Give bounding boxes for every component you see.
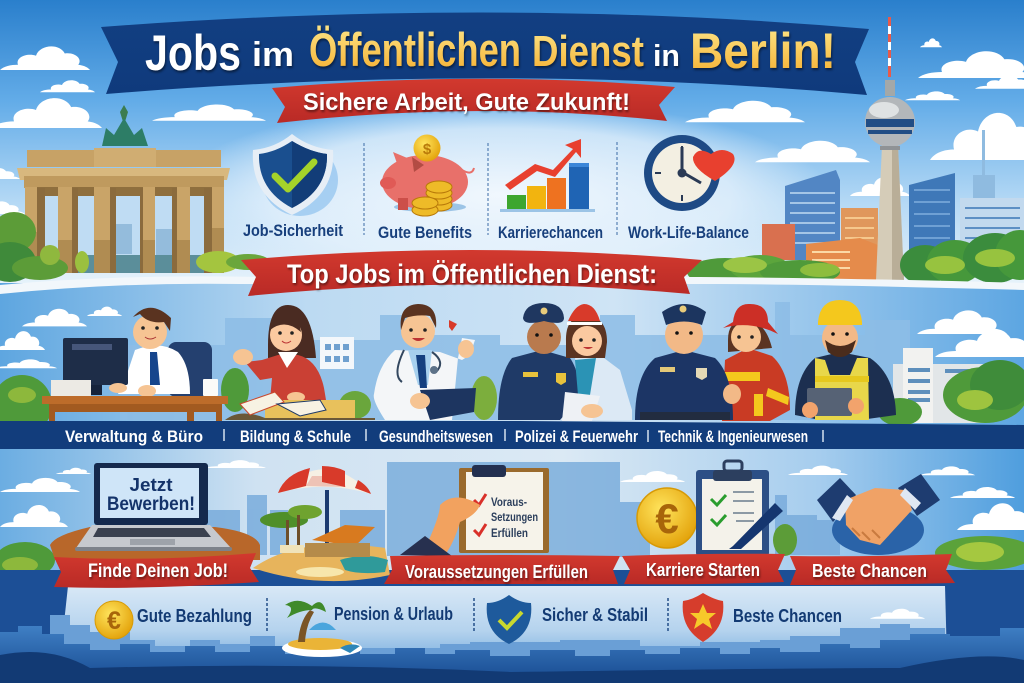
section 3 background xyxy=(0,449,1024,574)
icon: palm island xyxy=(282,601,362,657)
umbrella xyxy=(278,469,371,494)
illustration: beach island xyxy=(253,466,390,581)
icon: euro coin xyxy=(95,601,133,639)
ribbon text: Top Jobs im Öffentlichen Dienst: xyxy=(287,259,657,289)
label: Gute Bezahlung: Gute Bezahlung xyxy=(137,606,252,626)
euro coin: € xyxy=(655,495,679,542)
laptop: Bewerben! xyxy=(107,494,195,515)
ribbon text: Karriere Starten xyxy=(646,560,760,580)
title ribbon shape xyxy=(101,12,869,95)
checklist text: Voraus- xyxy=(491,495,527,509)
person: engineer xyxy=(795,300,896,420)
mug xyxy=(203,379,218,396)
trees: jobs section xyxy=(0,360,1024,435)
label: Gute Benefits: Gute Benefits xyxy=(378,223,472,242)
title text: Berlin! xyxy=(690,23,836,79)
building: schoolhouse xyxy=(320,337,354,369)
label: Technik und Ingenieurwesen: Technik & Ingenieurwesen xyxy=(658,427,808,446)
palm xyxy=(260,512,308,528)
person: firefighter xyxy=(722,304,790,421)
label: Verwaltung und Büro: Verwaltung & Büro xyxy=(65,427,203,446)
dividers xyxy=(267,598,668,633)
ribbon text: Beste Chancen xyxy=(812,561,927,581)
background: sky xyxy=(0,0,1024,290)
skyline: right city buildings xyxy=(762,130,1024,280)
clipboard xyxy=(696,461,783,556)
icon: small shield xyxy=(487,595,531,644)
ribbon xyxy=(790,554,955,585)
person: police officer 1 xyxy=(498,303,583,420)
benefit panel xyxy=(60,586,947,660)
step: start career xyxy=(622,461,785,584)
title banner xyxy=(101,12,869,95)
section 2 background xyxy=(0,283,1024,425)
lounger xyxy=(312,525,375,546)
step: best chances xyxy=(790,474,955,585)
pen xyxy=(729,503,783,549)
label: Pension und Urlaub: Pension & Urlaub xyxy=(334,604,453,624)
wood table xyxy=(50,527,260,560)
background: centre glow xyxy=(170,100,830,290)
label: Beste Chancen: Beste Chancen xyxy=(733,606,842,626)
title text: Jobs xyxy=(145,25,241,81)
icon: star shield xyxy=(683,593,723,642)
label: Gesundheitswesen: Gesundheitswesen xyxy=(379,427,493,446)
dark lower band xyxy=(0,570,1024,640)
label: Karrierechancen: Karrierechancen xyxy=(498,223,603,242)
ribbon text: Finde Deinen Job! xyxy=(88,561,228,582)
backdrop panel: requirements xyxy=(387,462,620,556)
background city: steps section xyxy=(205,495,840,560)
title text xyxy=(145,23,836,81)
ribbon text: Voraussetzungen Erfüllen xyxy=(405,562,588,582)
euro coin xyxy=(637,488,697,548)
red checks xyxy=(474,494,486,535)
clouds: steps section xyxy=(0,460,1024,530)
subtitle ribbon xyxy=(272,79,675,123)
benefits row xyxy=(243,134,749,242)
subtitle text: Sichere Arbeit, Gute Zukunft! xyxy=(303,89,630,116)
person: doctor xyxy=(374,304,476,420)
illustration: Fernsehturm tower xyxy=(865,17,915,280)
separators xyxy=(224,429,823,442)
label: Job-Sicherheit: Job-Sicherheit xyxy=(243,221,343,240)
background city: jobs section xyxy=(120,302,910,420)
trees: left of gate xyxy=(0,212,270,282)
ribbon xyxy=(54,553,259,588)
clouds: jobs section xyxy=(0,307,1024,368)
books and table xyxy=(265,400,355,418)
step: find your job xyxy=(50,463,260,588)
trees: right city xyxy=(687,230,1024,286)
step: meet requirements: Erfüllen xyxy=(491,526,528,540)
step: meet requirements: Setzungen xyxy=(491,510,538,524)
person: police officer 2 xyxy=(635,304,741,420)
title text: im xyxy=(252,36,294,74)
desk xyxy=(42,396,228,404)
icon: piggy bank with coins xyxy=(380,134,474,216)
white separating curve xyxy=(0,276,1024,294)
clouds: upper sky xyxy=(0,38,1024,214)
handshake xyxy=(817,474,940,555)
chair xyxy=(168,342,212,397)
summary row xyxy=(95,593,925,657)
label: Polizei und Feuerwehr: Polizei & Feuerwehr xyxy=(515,427,638,446)
ribbon: top jobs xyxy=(241,250,702,296)
trees: steps section xyxy=(0,524,1024,578)
screen text: Jetzt xyxy=(130,475,172,495)
icon: piggy bank with coins: $ xyxy=(423,141,432,158)
building: white office block xyxy=(893,348,985,423)
monitor xyxy=(63,338,128,385)
hands xyxy=(109,383,127,393)
head xyxy=(133,315,167,349)
clipboard xyxy=(459,468,549,553)
laptop xyxy=(75,463,232,551)
title text: Öffentlichen xyxy=(309,23,521,76)
papers xyxy=(51,380,91,396)
label: Sicher und Stabil: Sicher & Stabil xyxy=(542,605,648,625)
person: teacher xyxy=(225,305,375,420)
label: Bildung und Schule: Bildung & Schule xyxy=(240,427,351,446)
ribbon xyxy=(622,554,785,584)
icon: clock with heart xyxy=(644,135,735,211)
icon: shield with check xyxy=(253,134,338,216)
ribbon xyxy=(384,555,620,584)
title text: in xyxy=(653,38,680,73)
illustration: Brandenburg Gate xyxy=(17,105,230,273)
skyline silhouette xyxy=(0,626,1024,683)
icon: rising bar chart xyxy=(500,139,595,212)
divider xyxy=(364,142,617,235)
cloud xyxy=(870,609,925,619)
label: Work-Life-Balance: Work-Life-Balance xyxy=(628,223,749,242)
torso xyxy=(118,345,190,394)
jobs label bar xyxy=(0,421,1024,449)
person: office worker at desk xyxy=(42,308,228,421)
title text: Dienst xyxy=(532,27,644,76)
icon: euro coin: € xyxy=(107,607,121,635)
person: nurse xyxy=(560,304,632,421)
hand xyxy=(428,498,480,552)
skyline: pale buildings xyxy=(50,615,945,660)
step: meet requirements xyxy=(384,465,620,584)
